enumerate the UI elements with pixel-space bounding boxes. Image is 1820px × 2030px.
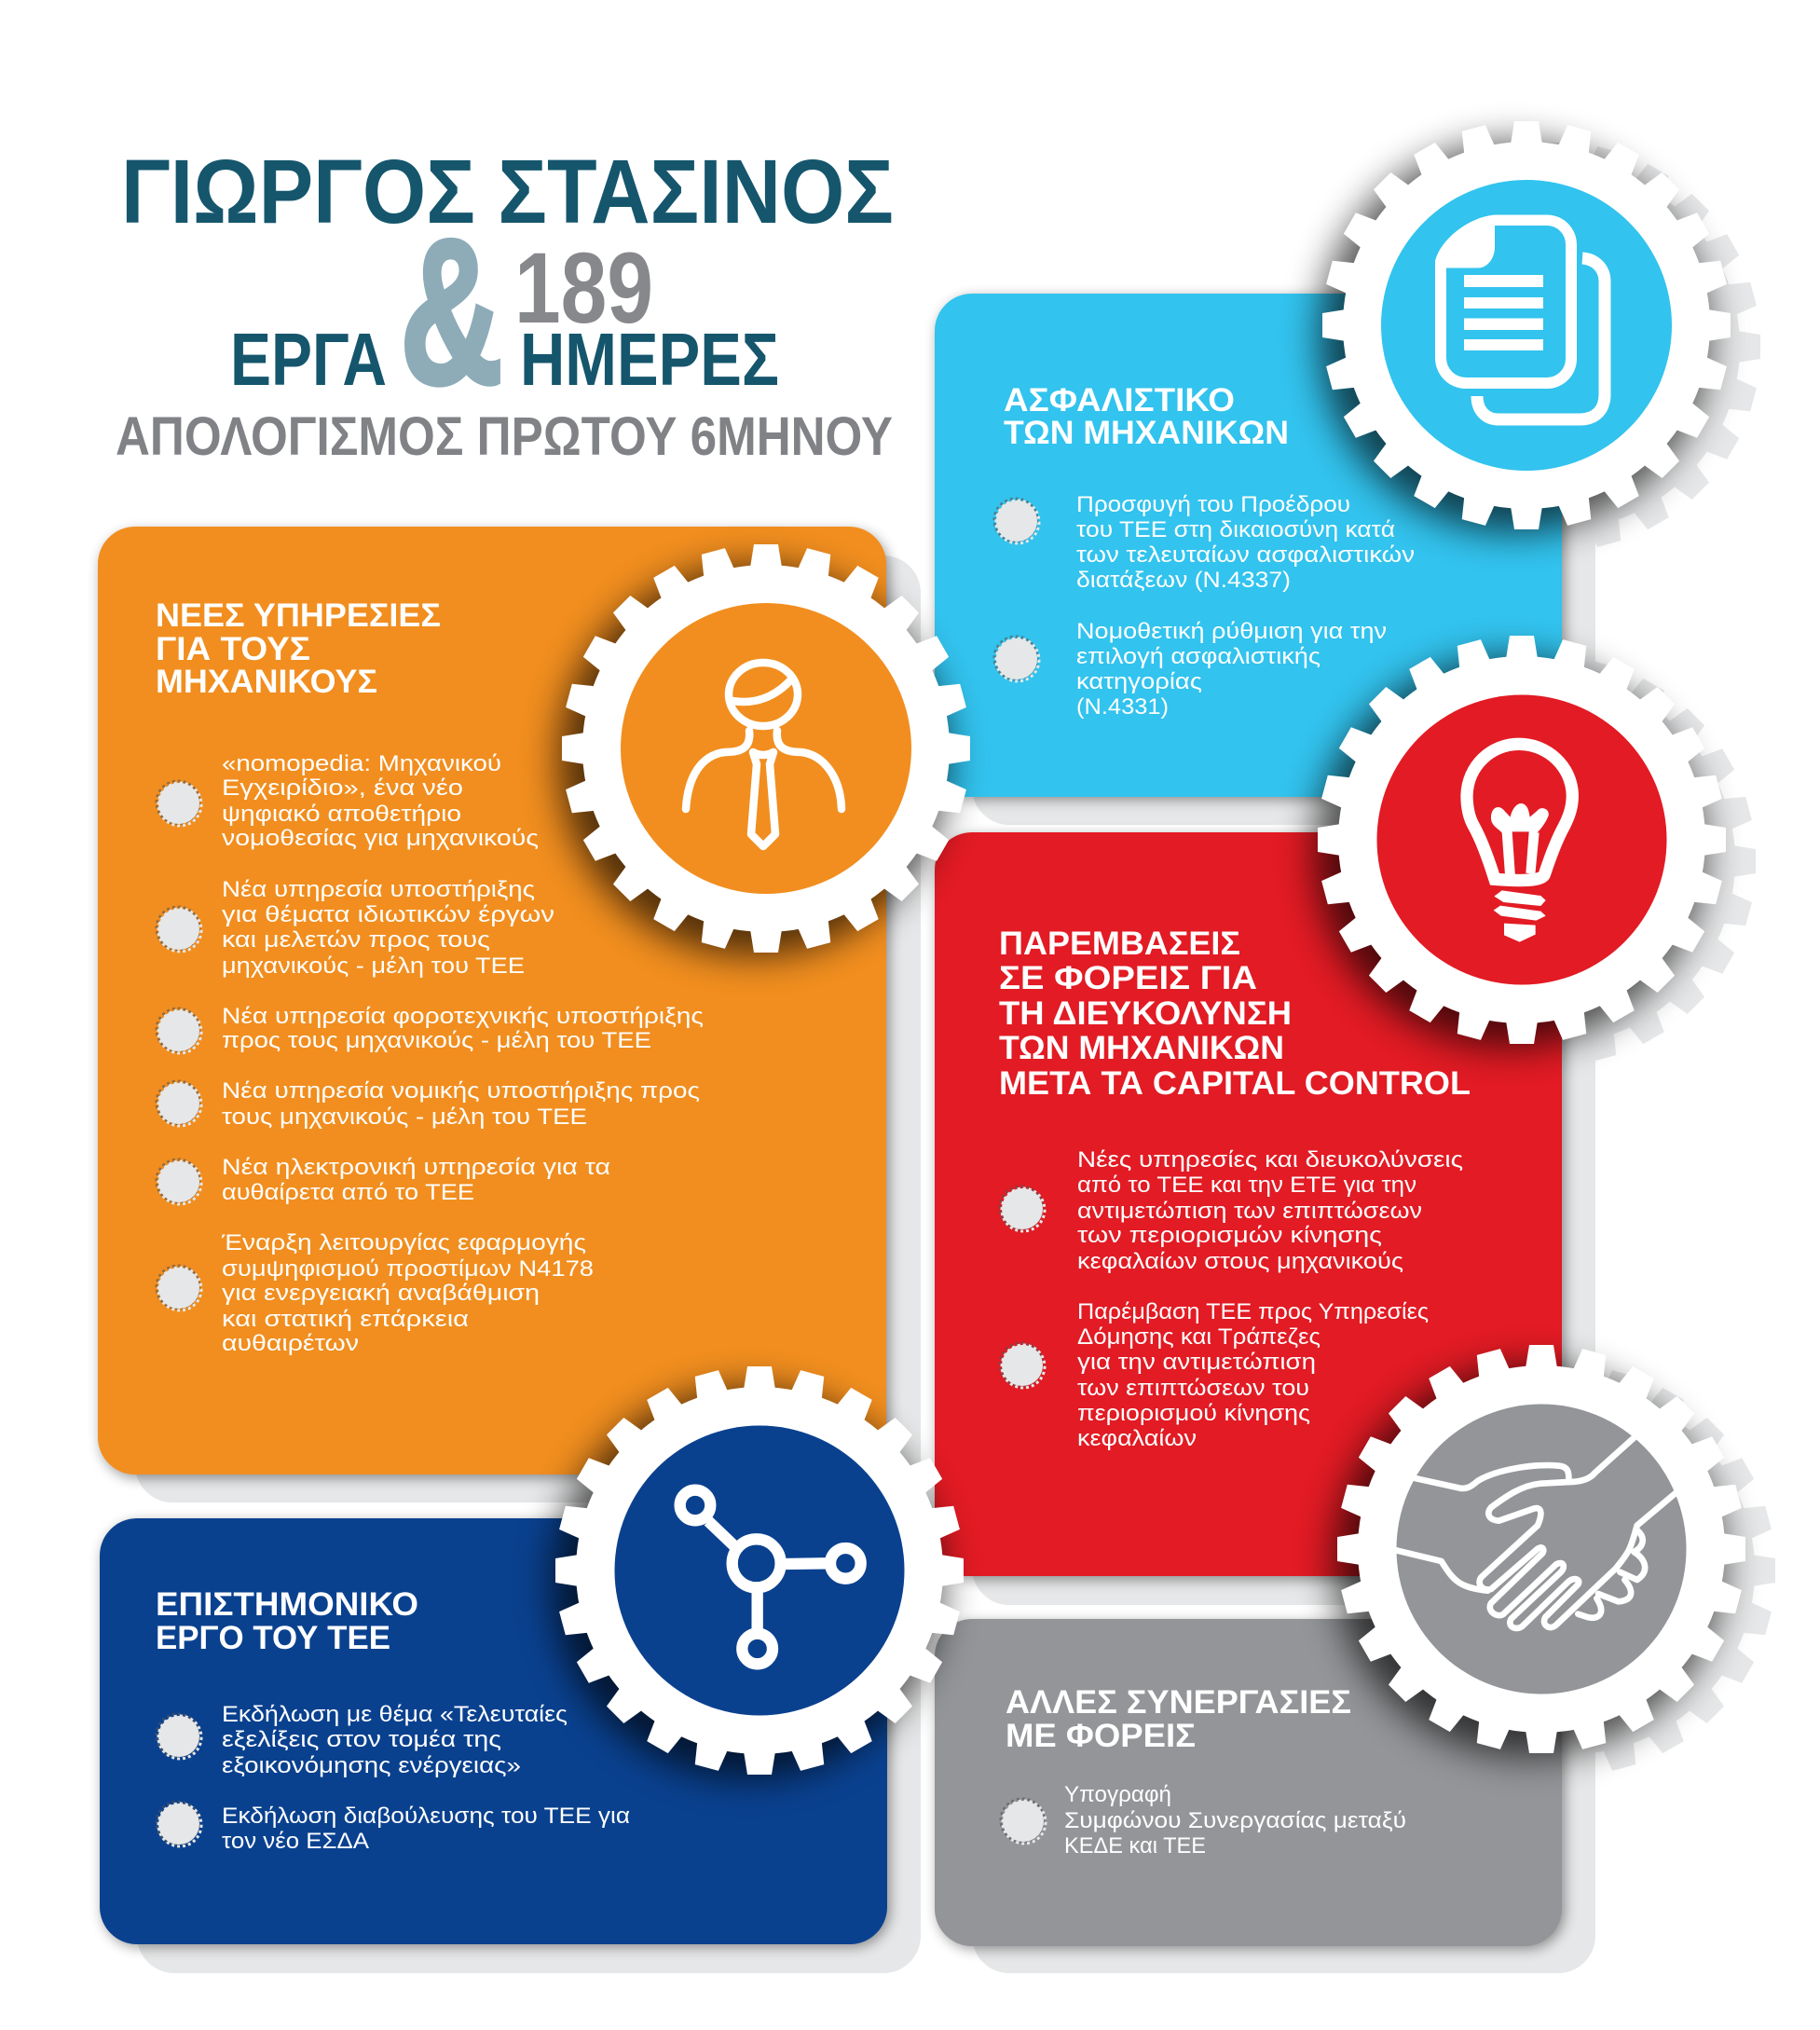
- icon: documents: [1435, 214, 1605, 419]
- item: nomopedia: «nomopedia: Μηχανικού: [222, 751, 501, 776]
- item: fines offset application: και στατική επάρκεια: [222, 1307, 469, 1332]
- item: intervention to building services and banks: κεφαλαίων: [1077, 1426, 1197, 1451]
- item: private works support: [157, 877, 554, 979]
- item: nomopedia: [157, 751, 539, 851]
- item: appeal to justice: των τελευταίων ασφαλιστικών: [1076, 542, 1415, 568]
- item: appeal to justice: διατάξεων (Ν.4337): [1076, 568, 1291, 593]
- item: fines offset application: συμψηφισμού προστίμων Ν4178: [222, 1256, 594, 1282]
- panel: engineers' insurance: [935, 294, 1562, 797]
- item: appeal to justice: του ΤΕΕ στη δικαιοσύνη κατά: [1076, 517, 1395, 542]
- subtitle: ΑΠΟΛΟΓΙΣΜΟΣ ΠΡΩΤΟΥ 6ΜΗΝΟΥ: [116, 406, 893, 467]
- heading: new services: ΓΙΑ ΤΟΥΣ: [156, 631, 310, 667]
- item: tax support: προς τους μηχανικούς - μέλη του ΤΕΕ: [222, 1028, 651, 1053]
- heading: insurance: [1004, 382, 1289, 451]
- item: nomopedia: Εγχειρίδιο», ένα νέο: [222, 775, 463, 801]
- item: fines offset application: για ενεργειακή αναβάθμιση: [222, 1281, 540, 1306]
- item: legal support: Νέα υπηρεσία νομικής υποστήριξης προς: [222, 1078, 700, 1104]
- item: tax support: Νέα υπηρεσία φοροτεχνικής υποστήριξης: [222, 1004, 704, 1029]
- heading: new services: ΝΕΕΣ ΥΠΗΡΕΣΙΕΣ: [156, 597, 441, 634]
- icon: person with tie: [686, 663, 842, 846]
- item: energy saving event: εξελίξεις στον τομέα της: [222, 1727, 501, 1752]
- item: intervention to building services and banks: [1000, 1299, 1429, 1451]
- panel: new services for engineers: [98, 527, 886, 1474]
- item: memorandum of cooperation: Συμφώνου Συνεργασίας μεταξύ: [1064, 1808, 1406, 1833]
- heading: interventions: ΣΕ ΦΟΡΕΙΣ ΓΙΑ: [999, 960, 1257, 996]
- item: tax support: [157, 1004, 704, 1053]
- item: unauthorized buildings service: [157, 1155, 610, 1205]
- ampersand: &: [400, 197, 503, 428]
- heading: insurance: ΤΩΝ ΜΗΧΑΝΙΚΩΝ: [1004, 415, 1289, 451]
- heading: insurance: ΑΣΦΑΛΙΣΤΙΚΟ: [1004, 382, 1235, 418]
- item: nomopedia: νομοθεσίας για μηχανικούς: [222, 826, 539, 851]
- item: new services and facilities: Νέες υπηρεσίες και διευκολύνσεις: [1077, 1147, 1463, 1173]
- item: intervention to building services and banks: για την αντιμετώπιση: [1077, 1350, 1316, 1375]
- heading: scientific work: [156, 1586, 418, 1656]
- item: private works support: Νέα υπηρεσία υποστήριξης: [222, 877, 535, 902]
- heading: interventions: ΤΩΝ ΜΗΧΑΝΙΚΩΝ: [999, 1030, 1284, 1066]
- heading: new services: [156, 597, 441, 700]
- item: fines offset application: Έναρξη λειτουργίας εφαρμογής: [221, 1230, 586, 1255]
- item: legislative regulation: κατηγορίας: [1076, 669, 1202, 694]
- item: new services and facilities: [1000, 1147, 1463, 1274]
- item: private works support: και μελετών προς τους: [222, 927, 490, 953]
- item: energy saving event: Εκδήλωση με θέμα «Τελευταίες: [222, 1702, 568, 1727]
- item: energy saving event: εξοικονόμησης ενέργειας»: [222, 1753, 521, 1778]
- item: energy saving event: [157, 1702, 568, 1778]
- item: nomopedia: ψηφιακό αποθετήριο: [222, 802, 461, 827]
- heading: interventions: ΠΑΡΕΜΒΑΣΕΙΣ: [999, 926, 1240, 962]
- item: unauthorized buildings service: αυθαίρετα από το ΤΕΕ: [222, 1180, 474, 1205]
- item: consultation event: [157, 1802, 630, 1854]
- item: private works support: μηχανικούς - μέλη του ΤΕΕ: [222, 953, 525, 979]
- item: legislative regulation: Νομοθετική ρύθμιση για την: [1076, 619, 1387, 644]
- gear: document: [1319, 121, 1731, 533]
- item: memorandum of cooperation: ΚΕΔΕ και ΤΕΕ: [1064, 1833, 1206, 1859]
- item: legislative regulation: (Ν.4331): [1076, 694, 1169, 720]
- gear: light bulb: [1314, 636, 1726, 1048]
- item: intervention to building services and banks: περιορισμού κίνησης: [1077, 1401, 1310, 1426]
- item: legislative regulation: [994, 619, 1387, 720]
- gear: person: [558, 544, 970, 956]
- item: unauthorized buildings service: Νέα ηλεκτρονική υπηρεσία για τα: [222, 1155, 610, 1180]
- item: fines offset application: αυθαιρέτων: [222, 1331, 359, 1356]
- panel: scientific work: [100, 1518, 887, 1944]
- item: fines offset application: [157, 1230, 594, 1356]
- item: appeal to justice: [994, 492, 1415, 593]
- icon: connected nodes: [680, 1490, 861, 1664]
- panel: interventions after capital controls: [935, 832, 1562, 1576]
- item: intervention to building services and banks: Δόμησης και Τράπεζες: [1077, 1324, 1321, 1350]
- heading: interventions: ΤΗ ΔΙΕΥΚΟΛΥΝΣΗ: [999, 995, 1292, 1032]
- heading: other partnerships: [1006, 1684, 1351, 1754]
- heading: interventions: [999, 926, 1471, 1102]
- item: appeal to justice: Προσφυγή του Προέδρου: [1076, 492, 1350, 517]
- number 189: 189: [514, 231, 653, 344]
- title block: [116, 141, 894, 467]
- item: private works support: για θέματα ιδιωτικών έργων: [222, 902, 554, 927]
- word: works: ΕΡΓΑ: [230, 318, 387, 401]
- item: memorandum of cooperation: Υπογραφή: [1064, 1782, 1171, 1807]
- item: legal support: [157, 1078, 700, 1130]
- item: legal support: τους μηχανικούς - μέλη του ΤΕΕ: [222, 1104, 587, 1130]
- item: new services and facilities: αντιμετώπιση των επιπτώσεων: [1077, 1199, 1422, 1224]
- panel soft shadows: [101, 297, 1565, 1949]
- heading: new services: ΜΗΧΑΝΙΚΟΥΣ: [156, 664, 377, 700]
- panel: other partnerships: [935, 1619, 1562, 1946]
- title: name: ΓΙΩΡΓΟΣ ΣΤΑΣΙΝΟΣ: [121, 141, 894, 242]
- item: intervention to building services and banks: Παρέμβαση ΤΕΕ προς Υπηρεσίες: [1077, 1299, 1429, 1324]
- item: consultation event: τον νέο ΕΣΔΑ: [222, 1829, 369, 1854]
- item: new services and facilities: κεφαλαίων στους μηχανικούς: [1077, 1249, 1403, 1274]
- item: intervention to building services and banks: των επιπτώσεων του: [1077, 1376, 1309, 1401]
- word: days: ΗΜΕΡΕΣ: [520, 318, 779, 401]
- item: consultation event: Εκδήλωση διαβούλευσης του ΤΕΕ για: [222, 1804, 630, 1829]
- heading: scientific work: ΕΠΙΣΤΗΜΟΝΙΚΟ: [156, 1586, 418, 1623]
- item: new services and facilities: των περιορισμών κίνησης: [1077, 1223, 1382, 1248]
- gear: handshake: [1334, 1345, 1745, 1757]
- item: new services and facilities: από το ΤΕΕ και την ΕΤΕ για την: [1077, 1173, 1416, 1198]
- heading: interventions: ΜΕΤΑ ΤΑ CAPITAL CONTROL: [999, 1065, 1471, 1102]
- gear: network: [552, 1366, 964, 1778]
- heading: scientific work: ΕΡΓΟ ΤΟΥ ΤΕΕ: [156, 1620, 390, 1656]
- heading: other partnerships: ΜΕ ΦΟΡΕΙΣ: [1006, 1718, 1196, 1754]
- item: legislative regulation: επιλογή ασφαλιστικής: [1076, 644, 1321, 669]
- icon: handshake: [1396, 1438, 1676, 1628]
- heading: other partnerships: ΑΛΛΕΣ ΣΥΝΕΡΓΑΣΙΕΣ: [1006, 1684, 1351, 1721]
- item: memorandum of cooperation: [1001, 1782, 1406, 1859]
- icon: light bulb: [1467, 744, 1572, 942]
